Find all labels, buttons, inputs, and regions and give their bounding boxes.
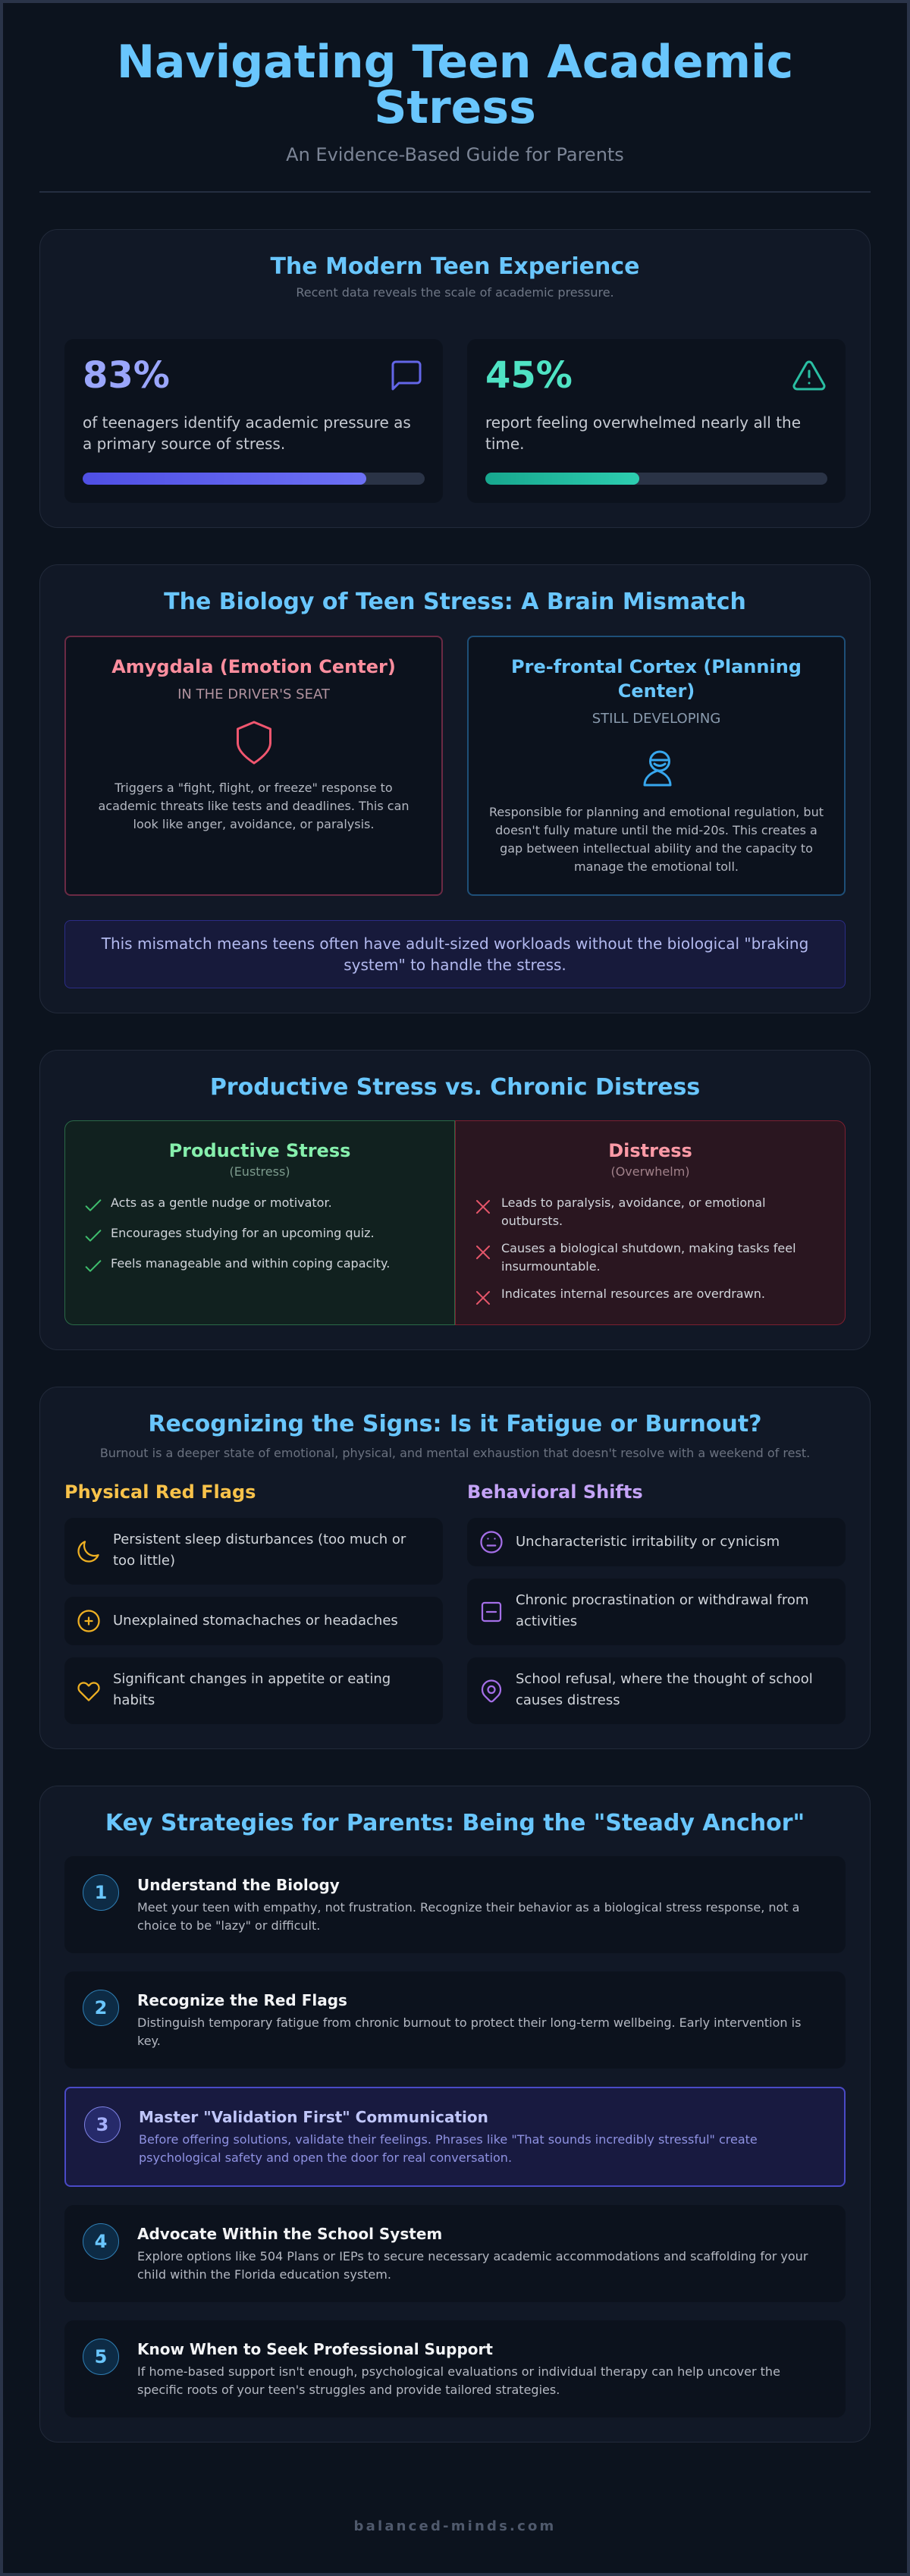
strategy 1 title: Understand the Biology (137, 1876, 340, 1894)
icon: cross 3 (476, 1291, 490, 1305)
strategy 3 description (139, 2132, 758, 2165)
strategy 2 description: Distinguish temporary fatigue from chronic burnout to protect their long-term wellbeing. Early intervention is (137, 2015, 801, 2030)
sign text (113, 1531, 406, 1569)
stat description (485, 413, 801, 453)
list item: Encourages studying for an upcoming quiz. (111, 1226, 375, 1240)
column heading: physical red flags: Physical Red Flags (64, 1481, 256, 1503)
icon: location pin (481, 1679, 502, 1702)
icon: shield (237, 721, 271, 765)
sign card: sleep (64, 1518, 443, 1585)
sign text: School refusal, where the thought of school (516, 1671, 813, 1687)
list item (501, 1241, 796, 1274)
number badge 4: 4 (95, 2231, 107, 2252)
strategy card 2 (64, 1971, 846, 2069)
amygdala description: Triggers a "fight, flight, or freeze" response to (115, 781, 393, 795)
heading: fatigue or burnout: Recognizing the Signs: Is it Fatigue or Burnout? (148, 1411, 762, 1437)
callout text (102, 935, 808, 974)
stat description: time. (485, 435, 525, 453)
icon: warning triangle (792, 361, 826, 390)
strategy 2 title: Recognize the Red Flags (137, 1991, 347, 2009)
sign card: procrastination (467, 1579, 846, 1645)
sign text: Unexplained stomachaches or headaches (113, 1613, 398, 1629)
amygdala description (98, 781, 410, 831)
number badge 5: 5 (95, 2346, 107, 2367)
pre-frontal heading: Center) (618, 680, 695, 702)
list item: Causes a biological shutdown, making tasks feel (501, 1241, 796, 1255)
strategy card 1 (64, 1856, 846, 1953)
amygdala description: look like anger, avoidance, or paralysis. (133, 817, 374, 831)
distress heading: Distress (608, 1140, 692, 1161)
strategy 3 description: psychological safety and open the door for real conversation. (139, 2150, 512, 2165)
icon: minus square (481, 1602, 502, 1622)
panel: recognizing the signs (39, 1387, 871, 1749)
amygdala heading: Amygdala (Emotion Center) (111, 656, 396, 677)
strategy 2 description: key. (137, 2034, 161, 2048)
stat description (83, 413, 411, 453)
card: pre-frontal cortex (467, 636, 846, 896)
pre-frontal description: manage the emotional toll. (574, 859, 739, 874)
strategy 1 description (137, 1900, 799, 1933)
sign text: causes distress (516, 1692, 620, 1708)
panel: productive stress vs distress (39, 1050, 871, 1350)
icon: cross 2 (476, 1246, 490, 1259)
sign card: irritability (467, 1518, 846, 1566)
callout text: system" to handle the stress. (344, 956, 566, 974)
column heading: behavioral shifts: Behavioral Shifts (467, 1481, 643, 1503)
icon: moon (77, 1541, 99, 1563)
productive heading: Productive Stress (169, 1140, 350, 1161)
strategy 1 description: Meet your teen with empathy, not frustration. Recognize their behavior as a biological stress response, not a (137, 1900, 799, 1915)
card: amygdala (64, 636, 443, 896)
icon: neutral face (480, 1531, 503, 1553)
heading: modern teen experience: The Modern Teen Experience (270, 253, 640, 280)
strategy 3 description: Before offering solutions, validate their feelings. Phrases like "That sounds incredibly stressful" create (139, 2132, 758, 2147)
panel: the modern teen experience (39, 229, 871, 528)
number badge 3 (84, 2106, 121, 2143)
amygdala description: academic threats like tests and deadlines. This can (98, 799, 410, 813)
stat description: of teenagers identify academic pressure as (83, 413, 411, 432)
callout: mismatch (64, 920, 846, 988)
sign text: habits (113, 1692, 155, 1708)
sign text: too little) (113, 1553, 175, 1569)
number badge 4 (83, 2223, 119, 2260)
subtitle: An Evidence-Based Guide for Parents (286, 144, 624, 165)
stat card: 45% (467, 339, 846, 503)
sign text: Persistent sleep disturbances (too much or (113, 1531, 406, 1547)
strategy 4 description: child within the Florida education system. (137, 2267, 391, 2282)
strategy card 3 highlighted (64, 2087, 846, 2187)
strategy 2 description (137, 2015, 801, 2048)
panel: biology of teen stress (39, 564, 871, 1013)
icon: head and body (643, 751, 672, 786)
sign text: Chronic procrastination or withdrawal from (516, 1592, 808, 1608)
comparison pane: productive stress (64, 1120, 455, 1325)
sign card: appetite (64, 1657, 443, 1724)
number badge 3: 3 (96, 2114, 108, 2135)
sign card: stomachaches (64, 1597, 443, 1645)
strategy 5 description (137, 2364, 780, 2397)
title (117, 36, 793, 134)
icon: plus circle (77, 1610, 100, 1632)
progress bar 45% (485, 473, 827, 485)
pre-frontal status: STILL DEVELOPING (592, 711, 720, 727)
heading: steady anchor: Key Strategies for Parents: Being the "Steady Anchor" (105, 1810, 805, 1836)
progress bar 83% (83, 473, 425, 485)
list item (501, 1195, 766, 1228)
strategy 5 description: If home-based support isn't enough, psychological evaluations or individual therapy can help uncover the (137, 2364, 780, 2379)
list item: Feels manageable and within coping capacity. (111, 1256, 390, 1271)
section subtitle: recent data: Recent data reveals the scale of academic pressure. (296, 285, 614, 300)
stat number 83%: 83% (83, 354, 170, 397)
productive sub-label: (Eustress) (229, 1164, 290, 1179)
icon: speech bubble (391, 361, 422, 391)
footer: website: balanced-minds.com (354, 2518, 556, 2534)
sign text (516, 1671, 813, 1708)
icon: cross 1 (476, 1200, 490, 1214)
list item: Indicates internal resources are overdrawn. (501, 1286, 765, 1301)
sign card: school refusal (467, 1657, 846, 1724)
amygdala status: IN THE DRIVER'S SEAT (177, 686, 330, 702)
strategy 4 title: Advocate Within the School System (137, 2225, 442, 2243)
strategy 5 title: Know When to Seek Professional Support (137, 2340, 493, 2358)
number badge 1 (83, 1874, 119, 1911)
list item: insurmountable. (501, 1259, 601, 1274)
stat description: a primary source of stress. (83, 435, 285, 453)
comparison pane: distress (455, 1120, 846, 1325)
sign text (516, 1592, 808, 1629)
stat card: 83% (64, 339, 443, 503)
strategy card 5 (64, 2320, 846, 2417)
number badge 1: 1 (95, 1882, 107, 1903)
sign text: Uncharacteristic irritability or cynicism (516, 1534, 780, 1550)
number badge 2 (83, 1990, 119, 2026)
callout text: This mismatch means teens often have adult-sized workloads without the biological "braking (102, 935, 808, 953)
stat description: report feeling overwhelmed nearly all the (485, 413, 801, 432)
sign text: activities (516, 1613, 577, 1629)
heading: brain mismatch: The Biology of Teen Stress: A Brain Mismatch (164, 589, 746, 615)
pre-frontal description: Responsible for planning and emotional regulation, but (489, 805, 824, 819)
strategy 4 description (137, 2249, 808, 2282)
strategy 4 description: Explore options like 504 Plans or IEPs to secure necessary academic accommodations and scaffolding for your (137, 2249, 808, 2263)
panel: key strategies (39, 1786, 871, 2442)
list item: Leads to paralysis, avoidance, or emotional (501, 1195, 766, 1210)
list item: outbursts. (501, 1214, 563, 1228)
number badge 2: 2 (95, 1997, 107, 2018)
pre-frontal heading (511, 656, 802, 702)
title: Stress (374, 81, 536, 134)
pre-frontal description: gap between intellectual ability and the capacity to (500, 841, 813, 856)
section subtitle: burnout definition: Burnout is a deeper state of emotional, physical, and mental exhaustion that doesn't resolve with a weekend of rest. (100, 1446, 810, 1460)
pre-frontal description: doesn't fully mature until the mid-20s. This creates a (495, 823, 817, 837)
sign text (113, 1671, 391, 1708)
pre-frontal heading: Pre-frontal Cortex (Planning (511, 656, 802, 677)
title: Navigating Teen Academic (117, 36, 793, 89)
sign text: Significant changes in appetite or eating (113, 1671, 391, 1687)
icon: check 2 (85, 1230, 102, 1242)
number badge 5 (83, 2339, 119, 2375)
heading: stress vs distress: Productive Stress vs. Chronic Distress (210, 1074, 700, 1101)
strategy 3 title: Master "Validation First" Communication (139, 2108, 488, 2126)
strategy card 4 (64, 2205, 846, 2302)
pre-frontal description (489, 805, 824, 874)
stat number 45%: 45% (485, 354, 573, 397)
icon: heart (77, 1682, 100, 1701)
strategy 5 description: specific roots of your teen's struggles and provide tailored strategies. (137, 2383, 560, 2397)
strategy 1 description: choice to be "lazy" or difficult. (137, 1918, 320, 1933)
distress sub-label: (Overwhelm) (610, 1164, 690, 1179)
list item: Acts as a gentle nudge or motivator. (111, 1195, 332, 1210)
icon: check 3 (85, 1260, 102, 1272)
icon: check 1 (85, 1199, 102, 1211)
